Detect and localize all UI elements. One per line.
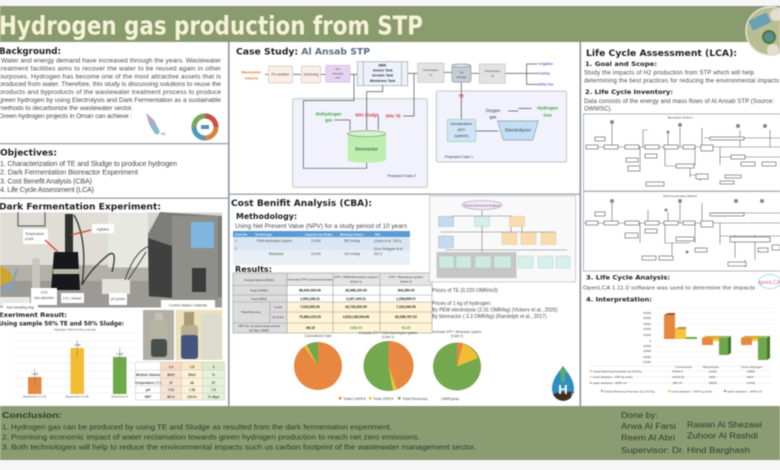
pie chart: PEM case: (Case 1) (382, 335, 394, 339)
pie chart: bioreactor case (433, 330, 482, 390)
objectives list: 3. Cost Benefit Analysis (CBA) (0, 176, 92, 186)
3D bar chart: impact categories: -30000 (642, 355, 651, 359)
conventional bars (664, 313, 697, 339)
authors: Arwa Al Farsi (621, 421, 676, 431)
panel: proposed case 2 (293, 73, 427, 187)
conclusion list: 2. Promising economic impact of water reclamation towards green hydrogen production to reach net zero emissions. (2, 432, 420, 442)
authors: Supervisor: Dr. Hind Barghash (621, 445, 750, 455)
table: methodology: Case No. (235, 232, 248, 236)
conclusion list: 1. Hydrogen gas can be produced by using TE and Sludge as resulted from the dark fermentation experiment. (2, 422, 392, 432)
title: Hydrogen gas production from STP (0, 12, 423, 42)
hydrogen and TE prices text: By bioreactor ( 3.3 OMR/kg) (Randolph et al., 2017) (432, 314, 547, 320)
3D bar chart: impact categories: 50000 (643, 311, 651, 315)
subheading: sample: Using sample 50% TE and 50% Sludge: (0, 320, 124, 328)
panel: case study (236, 48, 567, 187)
chart data table: -3900 (746, 375, 754, 379)
chart data table: -28000 (708, 381, 717, 385)
photo: sludge and TE bottles (176, 310, 222, 360)
influent label (241, 71, 262, 80)
biohydrogen label: gas (325, 117, 333, 122)
authors: Zuhoor Al Rashdi (687, 430, 758, 440)
table: methodology: 1 (235, 239, 237, 243)
chart data table: -11200 (708, 370, 717, 374)
panel: life cycle assessment (583, 48, 780, 394)
biohydrogen label: Biohydrogen (316, 111, 342, 116)
bar chart: hydrogen yield: 1.000 (31, 372, 39, 376)
unit: chlorination T2: Chlorination (484, 69, 501, 73)
pie legend: Total OPEX (373, 396, 394, 401)
pie chart: bioreactor case: (Case 2) (451, 334, 463, 338)
end uses (537, 62, 554, 86)
bar chart: hydrogen yield: 1.850 (74, 343, 81, 347)
chart legend: water depletion - WDP m3 (727, 390, 762, 394)
icon: openLCA logo (758, 274, 780, 288)
table: experiment conditions: % (212, 373, 215, 377)
heading: experiment result: Exeriment Result: (0, 311, 67, 319)
biohydrogen label (316, 111, 342, 122)
unit: pre-aeration: Pre aeration (271, 73, 290, 77)
icon: hydrogen logo: H2 (161, 132, 166, 136)
table: results: (Case 1) (350, 280, 362, 284)
background paragraph: Water and energy demand have increased through the years. Wastewater (1, 58, 222, 64)
bioreactor: Bioreactor (355, 147, 378, 153)
unit: grit removal: Grit (335, 67, 340, 71)
chart data table: -10800 (746, 370, 755, 374)
panel: cost benefit analysis (231, 196, 576, 401)
table: methodology: Working Volume (340, 232, 364, 236)
table: experiment conditions: 7.38 (189, 388, 195, 392)
oxygen label: Oxygen (486, 108, 501, 113)
end uses: Cooling (537, 72, 550, 76)
photo label: gas absorber: CO2 (41, 290, 48, 294)
table: results: 3,187,105.21 (346, 297, 366, 301)
table: methodology: PEM electrolyzer system (257, 239, 292, 243)
pie legend: OMR/year (441, 396, 460, 401)
chart data table: 44535.9 (672, 370, 683, 374)
influent label: Influent (245, 76, 259, 80)
3D bar chart: impact categories: 0 (649, 339, 651, 343)
unit: chlorination T1: T1 (429, 73, 433, 77)
hydrogen label: Hydrogen (537, 105, 558, 110)
objectives list (0, 159, 177, 194)
heading: CBA: Cost Benifit Analysis (CBA): (231, 199, 372, 209)
unit: chlorination T2: T2 (491, 74, 494, 78)
desalination unit: system) (454, 133, 469, 138)
photo label: agitator (92, 224, 114, 233)
bar: orange (28, 377, 42, 394)
photo label: control station (161, 300, 215, 309)
unit: MBR: -Anoxic Tank (372, 69, 393, 73)
unit: TE storage tank: storage (456, 75, 467, 79)
pie legend: Total Revenue (402, 396, 428, 401)
table: methodology: 552 m³/day (344, 239, 360, 243)
goal text: determining the best practices for reducing the environmental impacts (584, 78, 779, 84)
background paragraph: green hydrogen by using Electrolysis and Dark Fermentation as a sustainable (0, 97, 221, 104)
photo label: ph probe (109, 293, 127, 305)
heading: life cycle inventory: 2. Life Cycle Inventory: (585, 88, 673, 96)
photo label: vessel: 2.5 L Vessel (63, 296, 81, 300)
unit: chlorination T1: Chlorination (423, 68, 439, 72)
heading: methodology: Methodology: (236, 212, 297, 221)
chart legend: fossil depletion - FDP kg oil-Eq (671, 390, 712, 394)
table: experiment conditions: 80ml (167, 373, 175, 377)
panel: proposed case 1 (436, 83, 567, 162)
panel: proposed case 2: Proposed Case 2 (388, 174, 416, 178)
sludge label: 50% Sludge (355, 112, 379, 117)
unit: MBR (357, 62, 408, 86)
unit: grit removal (326, 65, 350, 82)
pie chart: bioreactor case: Al Ansab STP + Bioreactor system (433, 330, 482, 334)
objectives list: 2. Dark Fermentation Bioreactor Experiment (0, 168, 138, 176)
table: methodology: Capacity kg H2/day (305, 232, 333, 236)
table: experiment conditions: 104 hr (187, 395, 197, 399)
photo label: agitator: Agitator (97, 228, 110, 232)
unit: grit removal: unit (335, 76, 340, 80)
unit: TE storage tank (452, 64, 471, 82)
icon: H2 logo: H (558, 382, 568, 397)
table: experiment conditions: pH (146, 388, 151, 392)
unit: pre-aeration (268, 66, 293, 83)
inventory text: Data consists of the energy and mass flows of Al Ansab STP (Source: (584, 99, 774, 105)
table: results: 86,000,000.00 (299, 288, 321, 292)
bar chart: hydrogen yield: 1.500 (116, 352, 124, 356)
background paragraph: Green hydrogen projects in Oman can achieve : (0, 113, 132, 120)
table: results: 70,884,223.93 (299, 315, 321, 319)
inventory text: OWWSC). (584, 106, 612, 112)
table: experiment conditions: 3 (213, 365, 215, 369)
icon: SDG wheel (194, 116, 216, 138)
unit: MBR: MBR (379, 63, 387, 67)
goal text (584, 70, 779, 84)
3D bar chart: impact categories: -20000 (642, 349, 651, 353)
chart data table: Global Warming Potential- kg CO2 Eq. (593, 370, 643, 374)
objectives list: 1. Characterization of TE and Sludge to produce hydrogen (0, 159, 177, 168)
hydrogen and TE prices text: Prices of TE (0.220 OMR/m3) (432, 288, 498, 294)
chart data table: fossil depletion - FDP kg oil-Eq (593, 375, 633, 379)
bar chart: hydrogen yield (12, 328, 138, 398)
photo label: temperature probe (23, 229, 48, 244)
bar: yellow (70, 348, 84, 394)
process connectors (265, 64, 537, 84)
background paragraph: purposes. Hydrogen has become one of the most attractive assets that is (0, 74, 222, 80)
authors: Rawan Al Shezawi (687, 420, 762, 430)
table: methodology: 100 m³/day (344, 252, 360, 256)
table: results: Al Ansab STP Conventional case (287, 278, 333, 282)
table: methodology: Bioreactor (269, 252, 284, 256)
table: experiment conditions: 7.5 (211, 388, 216, 392)
hydrogen label: Gas (543, 112, 552, 117)
3D bar chart: impact categories: -40000 (642, 360, 651, 364)
pie chart: PEM case (359, 331, 418, 391)
photo label: vessel (61, 293, 84, 303)
pie legend: Total CAPEX (343, 396, 366, 401)
heading: objectives: Objectives: (0, 148, 57, 158)
table: results: 53.35 (402, 326, 410, 330)
photo label: gas absorber (31, 288, 57, 305)
chart data table (589, 365, 772, 385)
pie legend (339, 396, 460, 401)
chart data table: -583.34 (672, 381, 682, 385)
icon: hydrogen logo (146, 113, 166, 136)
unit: grit removal: removal (332, 71, 343, 75)
table: results: 1,993,168.31 (300, 297, 320, 301)
unit: MBR: -Membrane Tank (369, 79, 396, 83)
influent label: Wastewater (241, 71, 262, 75)
chart data table: -3400 (708, 375, 716, 379)
hydrogen and TE prices text: By PEM electrolysis (2.31 OMR/kg) (Vickers et al., 2020) (432, 308, 558, 314)
header banner (0, 7, 780, 42)
desalination unit: (RO (458, 127, 465, 132)
biohydrogen bars (702, 336, 731, 355)
background paragraph: treatment facilities aims to recover the water to be reused again in other (0, 66, 222, 72)
chart data table: 19230.93 (672, 375, 684, 379)
table: methodology: 10,000 (311, 252, 321, 256)
chart legend (601, 390, 762, 394)
table: results: NPV for 10 years study period (238, 324, 280, 328)
table: methodology: 10,000 (311, 239, 321, 243)
electrolyzer: Electrolyzer (505, 127, 531, 133)
table: results: 2308.44 (350, 326, 362, 330)
photo: sample bottle (143, 310, 174, 360)
table: results: 36,698,100.00 (345, 288, 367, 292)
heading: LCA: Life Cycle Assessment (LCA): (586, 48, 737, 58)
heading: case study: Case Study: Al Ansab STP (236, 48, 370, 58)
photo label: gas sampling bag: Gas sampling bag (6, 306, 34, 310)
objectives list: 4. Life Cycle Assessment (LCA) (0, 185, 94, 194)
heading: dark fermentation: Dark Fermentation Experiment: (0, 202, 161, 212)
table: results: 304,350.00 (398, 288, 415, 292)
panel: conclusion (0, 406, 780, 460)
bar chart: hydrogen yield: Hydrogen Yield (ml H2/ g sample) (54, 328, 96, 332)
icon: treatment plant badge (746, 7, 780, 56)
panel dividers (0, 42, 581, 407)
LCA flow diagrams: Dark Fermentation Method (663, 194, 697, 198)
icon: H2 logo (552, 366, 574, 401)
background paragraph: products and byproducts of the wastewater treatment process to produce (0, 89, 221, 96)
inventory text (584, 99, 774, 112)
oxygen label (486, 108, 501, 120)
table: experiment conditions: 7.02 (168, 388, 174, 392)
table: experiment conditions: 1.4 (169, 365, 173, 369)
table: experiment conditions: Temperature ( C ) (135, 381, 161, 385)
background paragraph (0, 58, 222, 120)
economic framework diagram (430, 196, 576, 282)
table: methodology: 2017) (374, 252, 382, 256)
panel: proposed case 1: Proposed Case 1 (445, 155, 473, 159)
table: experiment conditions: 46 (190, 381, 194, 385)
heading: goal and scope: 1. Goal and Scope: (585, 60, 657, 68)
process flow diagram (241, 62, 567, 187)
unit: TE storage tank: TE (459, 71, 463, 75)
bar chart: hydrogen yield: Experiment 1 (1.4) (23, 394, 46, 398)
table: methodology: 2 (235, 247, 237, 251)
hydrogen and TE prices text: Prices of 1 kg of hydrogen: (432, 301, 491, 307)
3D bar chart: impact categories: -10000 (642, 344, 651, 348)
pie chart: PEM case: Al Ansab STP + PEM Electrolyzer system (359, 331, 418, 335)
oxygen label: gas (489, 115, 496, 120)
table: results: (Case 2) (400, 280, 412, 284)
table: results: Total OPEX (251, 297, 267, 301)
table: results: 4,819,138,094.66 (343, 315, 369, 319)
table: results: STP + Bioreactor system (389, 275, 424, 279)
table: methodology (233, 231, 410, 265)
table: experiment conditions: 66 hr (167, 395, 176, 399)
pie chart: conventional case (294, 334, 342, 390)
table: results: 10 years (272, 315, 284, 319)
pointer arrows (45, 230, 91, 252)
green hydrogen bars (741, 336, 770, 360)
unit: chlorination T1 (418, 63, 444, 82)
conclusion list: 3. Both technologies will help to reduce the environmental impacts such us carbon footprint of the wastewater management sector. (2, 442, 476, 452)
table: experiment conditions: 80ml (188, 373, 196, 377)
authors (621, 410, 762, 455)
desalination unit (447, 119, 476, 142)
analysis text: OpenLCA 1.11.0 software was used to determine the impacts (583, 286, 755, 292)
authors: Done by: (621, 410, 658, 420)
unit: screening (301, 66, 321, 83)
bar chart: hydrogen yield: Experiment 2 (1.8) (66, 394, 89, 398)
table: results: Total Revenue (241, 310, 261, 314)
table: results: Annual Values (RMO) (244, 278, 274, 282)
icon: H2 logo: 2 (571, 393, 574, 399)
table: results (233, 273, 432, 333)
3D bar chart: impact categories: 40000 (643, 316, 651, 320)
unit: MBR: -Aerobic Tank (371, 74, 393, 78)
table: methodology: Ref. (375, 232, 381, 236)
table: results: 7,192,040.00 (396, 305, 416, 309)
panel: objectives (0, 148, 177, 194)
3D bar chart: impact categories (589, 308, 775, 394)
heading: results: Results: (235, 265, 272, 274)
table: results: Total CAPEX (250, 288, 268, 292)
background paragraph: methods to decarbonize the wastewater sector. (0, 105, 133, 112)
panel: background (0, 47, 222, 138)
table: results: (M Rial, OMR) (249, 328, 269, 332)
table: experiment conditions: 71 days (208, 395, 220, 399)
photo label: ph probe: pH probe (111, 297, 125, 301)
3D bar chart: impact categories: 30000 (643, 322, 651, 326)
table: experiment conditions (135, 362, 224, 400)
3D bar chart: impact categories: 20000 (643, 327, 651, 331)
bar: green (113, 357, 126, 394)
bar chart: hydrogen yield: Experiment 3 (111, 394, 128, 398)
heading: life cycle analysis: 3. Life Cycle Analysis: (586, 274, 670, 282)
chart data table: Conventional (675, 365, 692, 369)
hydrogen label (537, 105, 558, 117)
table: methodology: Technology (255, 232, 272, 236)
table: results: 43,725,300.00 (345, 305, 367, 309)
panel: proposed case 1: TE (459, 93, 464, 98)
hydrogen and TE prices text (432, 288, 558, 320)
LCA flow diagrams (584, 114, 780, 271)
chart data table: Biohydrogen (703, 365, 720, 369)
table: experiment conditions: Medium Volume (136, 373, 160, 377)
photo label: control station: Control Station Calibrate (169, 304, 207, 308)
economic framework diagram: Techno-Economic Analysis (464, 204, 500, 208)
desalination unit: Desalination (450, 121, 472, 126)
chart data table: water depletion - WDP m3 (593, 381, 627, 385)
table: experiment conditions: 37 (169, 381, 173, 385)
table: experiment conditions: HRT (145, 395, 151, 399)
table: results: 82,098,767.02 (395, 315, 417, 319)
table: results: 1,258,655.07 (396, 297, 416, 301)
table: methodology: (Jones et al., 2021) (374, 239, 401, 243)
table: methodology: (Guo-Xiangyao et al., (374, 247, 404, 251)
goal text: Study the impacts of H2 production from STP which will help (584, 70, 755, 76)
table: results: STP + PEM Electrolyzer system (334, 275, 378, 279)
table: results: -56.15 (305, 326, 315, 330)
end uses: Utility Use (537, 82, 554, 86)
photo label: temperature probe: Temperature (25, 232, 44, 236)
TE label: 50% TE (386, 113, 401, 118)
panel: dark fermentation experiment (0, 202, 224, 400)
photo label: temperature probe: probe (25, 237, 34, 241)
end uses: Irrigation (539, 62, 553, 66)
table: experiment conditions: 37 (212, 381, 215, 385)
photo: lab setup (0, 212, 222, 311)
heading: background: Background: (0, 47, 61, 57)
background paragraph: produced from water. Therefore, this study is discussing solutions to reuse the (0, 81, 221, 88)
table: experiment conditions: 1.8 (190, 365, 194, 369)
photo label: gas absorber: Gas absorber (34, 296, 55, 300)
unit: chlorination T2 (479, 64, 505, 83)
LCA flow diagrams: Biocrylation Method (668, 116, 693, 120)
chart data table: -37400 (746, 381, 755, 385)
heading: interpretation: 4. Interpretation: (586, 296, 652, 304)
methodology text: Using Net Present Value (NPV) for a study period of 10 years (235, 223, 407, 230)
table: results: 3 year (274, 305, 282, 309)
pie chart: conventional case: Conventional Case (305, 334, 332, 338)
heading: conclusion: Conclusion: (2, 411, 62, 420)
conclusion list (2, 422, 476, 452)
unit: screening: Screening (303, 73, 319, 77)
authors: Reem Al Abri (621, 432, 675, 442)
table: results: 7,020,000.00 (300, 305, 320, 309)
3D bar chart: impact categories: 10000 (643, 333, 651, 337)
chart legend: Global Warming Potential- kg CO2 Eq. (604, 390, 655, 394)
chart data table: Green Hydrogen (741, 365, 763, 369)
photo label: gas sampling bag (3, 303, 38, 311)
